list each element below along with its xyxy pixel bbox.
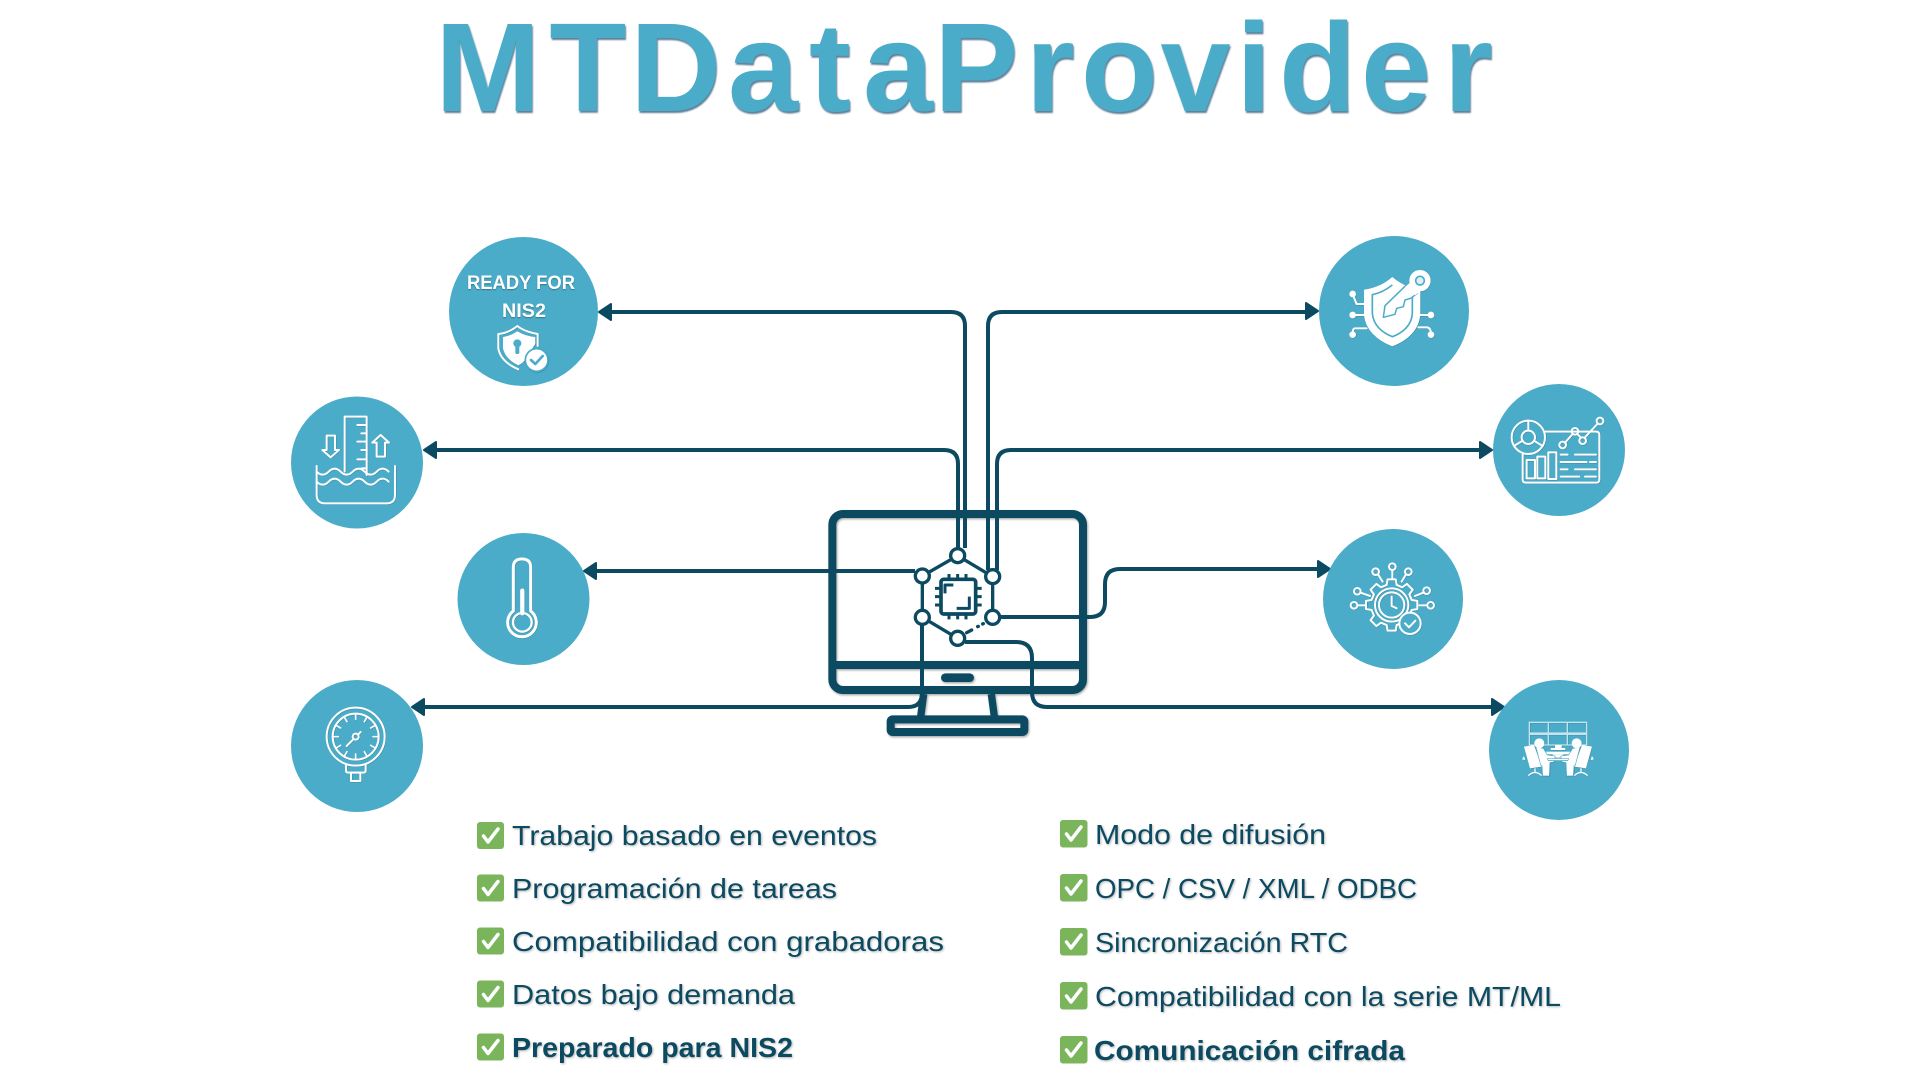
- icon: shield with check: [498, 326, 548, 371]
- icon: gear with clock and check: [1351, 563, 1434, 634]
- feature list: right column: [1060, 819, 1561, 1066]
- heading: ready for: READY FOR: [467, 273, 575, 294]
- central monitor with chip: [832, 514, 1083, 732]
- arrow: to water level: [424, 442, 958, 548]
- heading: NIS2: NIS2: [502, 301, 546, 322]
- item: cifrada: Comunicación cifrada: [1094, 1035, 1405, 1066]
- item: serie MT/ML: Compatibilidad con la serie MT/ML: [1095, 981, 1561, 1012]
- arrow: to encryption: [988, 303, 1318, 570]
- icon: operators at video wall: [1522, 722, 1594, 776]
- item: tareas: Programación de tareas: [512, 873, 837, 904]
- icon: dashboard charts: [1512, 418, 1603, 483]
- icon: shield with key and circuit: [1349, 270, 1434, 346]
- circle: pressure gauge: [291, 680, 423, 812]
- left operator: [1522, 738, 1555, 776]
- circle: encrypted key shield: [1319, 236, 1469, 386]
- icon: pressure gauge: [327, 708, 385, 781]
- arrow: to thermometer: [584, 563, 915, 579]
- arrow: to NIS2: [599, 304, 965, 548]
- circle: water level: [291, 396, 423, 528]
- item: eventos: Trabajo basado en eventos: [512, 820, 877, 851]
- icon: thermometer: [508, 559, 536, 637]
- item: RTC: Sincronización RTC: [1095, 927, 1348, 958]
- item: NIS2: Preparado para NIS2: [512, 1032, 793, 1063]
- item: grabadoras: Compatibilidad con grabadoras: [512, 926, 944, 957]
- circle: scheduling gear: [1323, 529, 1463, 669]
- right operator: [1561, 738, 1594, 776]
- circle: ready for NIS2: [449, 237, 598, 386]
- circle: control room: [1489, 680, 1629, 820]
- circle: thermometer: [458, 533, 590, 665]
- circle: dashboard: [1493, 384, 1625, 516]
- feature list: left column: [477, 820, 944, 1063]
- arrow: to scheduling gear: [1000, 561, 1330, 617]
- arrow: to pressure gauge: [412, 625, 922, 715]
- item: formatos: OPC / CSV / XML / ODBC: [1095, 873, 1417, 904]
- arrow: to dashboard: [997, 442, 1492, 570]
- icon: water level ruler: [317, 417, 395, 503]
- arrow: to control room: [965, 642, 1504, 715]
- title: MTDataProvider: [435, 0, 1493, 138]
- item: difusion: Modo de difusión: [1095, 819, 1326, 850]
- item: datos: Datos bajo demanda: [512, 979, 795, 1010]
